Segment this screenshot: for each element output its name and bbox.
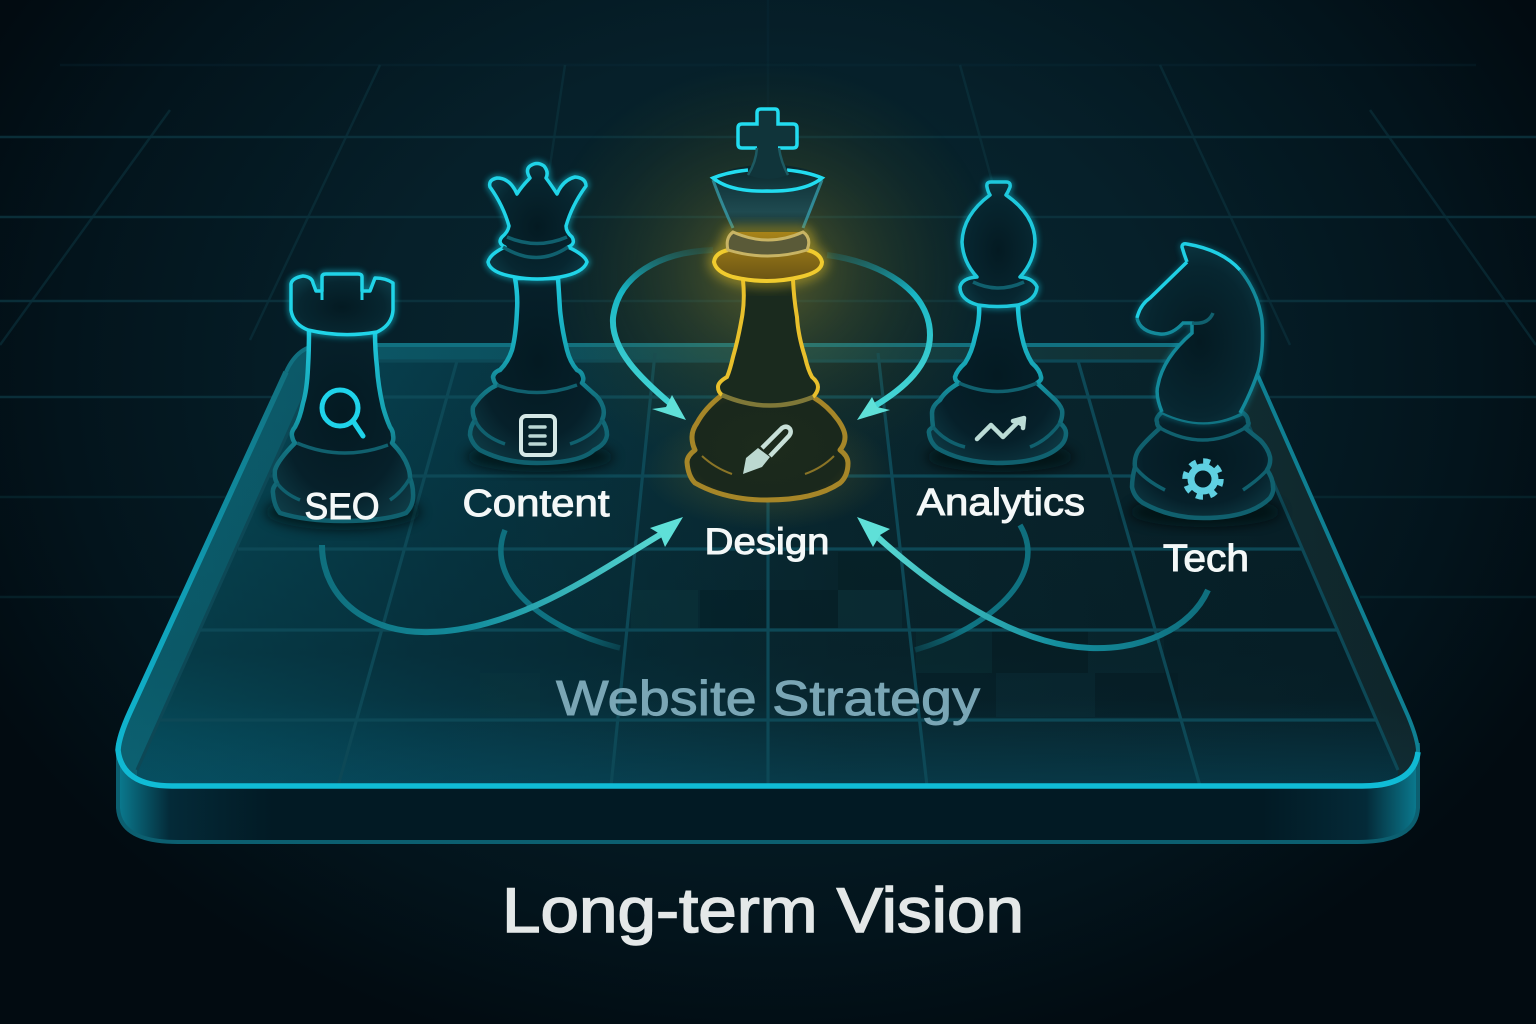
board: grid lines [137,353,1398,786]
board: checker squares [480,552,1178,717]
king base inner line [702,456,834,474]
arrow: SEO to Design [322,517,683,632]
king glow [538,60,998,480]
board: edges [286,345,1258,376]
bishop head glow [960,182,1037,306]
label: Design: Design [704,521,830,562]
knight head glow [1137,244,1262,422]
icon: trend line [977,418,1024,439]
arrow: Content arc [501,530,620,648]
arrow: Analytics arc [915,525,1028,650]
title: Long-term Vision: Long-term Vision [502,876,1024,946]
arrow: upper left to Design [613,250,713,420]
label: SEO: SEO [304,486,380,527]
knight jaw and collar [1135,313,1267,490]
piece: king (Design) [643,109,893,530]
queen body [470,278,607,463]
knight base [1132,412,1273,518]
king crown flare [712,164,823,232]
icon: pen [743,427,791,474]
king collar [714,232,822,281]
board title: Website Strategy: Website Strategy [556,672,981,726]
king base [687,395,848,500]
label: Tech: Tech [1163,538,1249,580]
bishop collars [933,282,1060,447]
queen collars [475,237,602,444]
bishop head [960,182,1037,306]
rook collar [277,443,410,500]
icon: gear [1185,461,1221,497]
label: Content: Content [462,483,610,525]
piece: bishop (Analytics) [926,182,1074,472]
king cross [738,109,797,179]
king collar glow [714,232,822,281]
queen crown [488,164,587,279]
label: Analytics: Analytics [917,482,1085,524]
king body [718,280,818,406]
arrow: Tech to Design [857,517,1208,648]
rook crenel stubs [322,291,362,300]
board: top surface [118,345,1418,786]
board: side wall [118,745,1418,842]
rook head glow [291,274,393,335]
arrow: upper right to Design [827,255,930,420]
rook body [273,330,413,521]
icon: magnifier [322,390,363,436]
icon: document [521,416,555,455]
board: rim band [118,345,1418,778]
piece: knight (Tech) [1129,244,1281,527]
piece: queen (Content) [466,164,614,472]
bishop body [929,305,1066,463]
piece: rook (SEO) [265,274,421,530]
knight head [1137,244,1262,422]
queen crown glow [488,164,587,279]
rook head [291,274,393,335]
background grid [0,0,1536,597]
